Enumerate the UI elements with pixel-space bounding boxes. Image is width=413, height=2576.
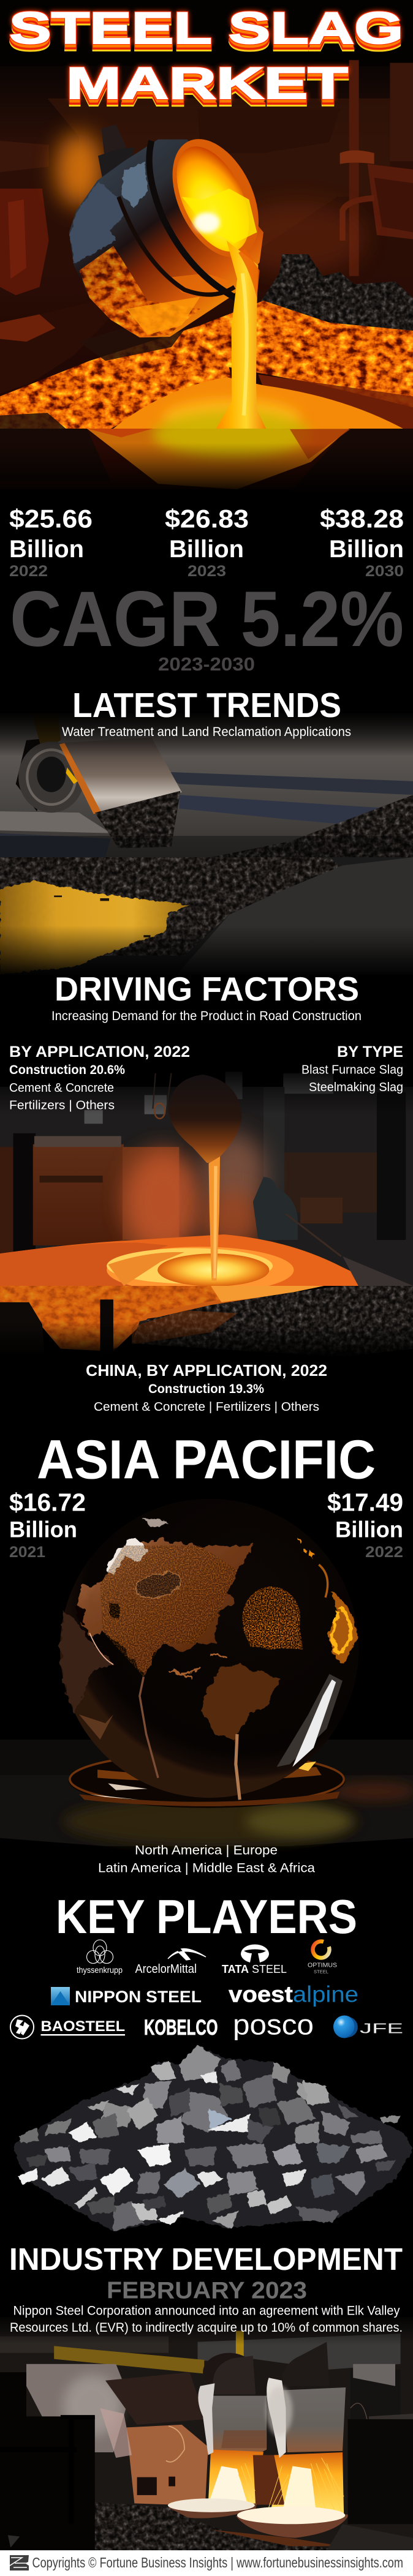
photo: ladle pouring molten slag (0, 0, 413, 495)
driving factor text: Increasing Demand for the Product in Road Construction (51, 1009, 362, 1023)
stat 2023: Billion (169, 536, 244, 563)
segment: by type: BY TYPE (337, 1043, 403, 1061)
stat 2030: $38.28 (320, 505, 404, 533)
segment: by application: Construction 20.6% (9, 1063, 125, 1077)
photo: steel plant ladles (0, 2311, 413, 2550)
logo: Optimus Steel: OPTIMUS (308, 1962, 337, 1969)
title: STEEL SLAG (9, 4, 403, 53)
title: MARKET (66, 59, 348, 108)
photo: steel slag pile (0, 2045, 413, 2239)
panel: Asia Pacific (0, 1429, 413, 1875)
logo: Baosteel (10, 2016, 125, 2039)
heading: latest trends: LATEST TRENDS (72, 686, 341, 725)
development text: Resources Ltd. (EVR) to indirectly acquire up to 10% of common shares. (10, 2321, 403, 2335)
stat 2021: $16.72 (9, 1488, 86, 1516)
heading: Asia Pacific: ASIA PACIFIC (37, 1429, 376, 1490)
logo: JFE: JFE (360, 2021, 403, 2037)
logo: ArcelorMittal (135, 1949, 206, 1976)
heading: driving factors: DRIVING FACTORS (55, 970, 359, 1008)
icon: Fortune Business Insights logo (10, 2555, 29, 2570)
development text (10, 2304, 403, 2335)
title (9, 4, 403, 108)
logo: JFE (333, 2016, 403, 2038)
other regions (98, 1843, 315, 1875)
logo: voestalpine: voestalpine (229, 1981, 358, 2007)
stat 2021 (9, 1488, 86, 1561)
segment: by application: Fertilizers | Others (9, 1098, 115, 1112)
stat 2022 regional: $17.49 (327, 1488, 403, 1516)
panel: market size stats (9, 505, 404, 675)
segment: China by application (86, 1361, 327, 1414)
heading: industry development: INDUSTRY DEVELOPMENT (9, 2242, 403, 2277)
stat 2030 (320, 505, 404, 580)
photo: furnace pouring (0, 1065, 413, 1293)
stat 2030: Billion (329, 536, 404, 563)
stat 2022 regional (327, 1488, 403, 1561)
logo: Optimus Steel (308, 1939, 337, 1974)
segment: by application: BY APPLICATION, 2022 (9, 1043, 190, 1061)
panel: hero (0, 0, 413, 495)
illustration: copper globe (0, 1499, 413, 1846)
segment: by application: Cement & Concrete (9, 1081, 114, 1095)
photo: road paving (0, 710, 413, 857)
photo: furnace rim and rock (0, 1286, 413, 1368)
panel: driving factors (0, 970, 413, 1414)
other regions: Latin America | Middle East & Africa (98, 1861, 315, 1875)
footer (0, 2550, 413, 2576)
stat 2022: Billion (9, 536, 84, 563)
logo: Optimus Steel: STEEL (314, 1969, 328, 1974)
stat 2023 (165, 505, 249, 580)
development text: Nippon Steel Corporation announced into an agreement with Elk Valley (13, 2304, 400, 2318)
logo: thyssenkrupp (77, 1940, 123, 1975)
stat 2023: $26.83 (165, 505, 249, 533)
stat 2023: 2023 (188, 563, 226, 580)
other regions: North America | Europe (135, 1843, 278, 1858)
stat 2022: 2022 (9, 563, 48, 580)
logo: Baosteel: BAOSTEEL (40, 2018, 125, 2035)
stat 2030: 2030 (365, 563, 404, 580)
stat 2021: Billion (9, 1517, 77, 1542)
segment: China by application: Construction 19.3% (148, 1382, 264, 1396)
panel: latest trends (0, 686, 413, 994)
segment: by type: Blast Furnace Slag (301, 1063, 403, 1076)
stat 2022 (9, 505, 93, 580)
segment: by type: Steelmaking Slag (309, 1080, 403, 1094)
heading: key players: KEY PLAYERS (56, 1890, 357, 1943)
logo: Kobelco: KOBELCO (144, 2016, 218, 2040)
logo: Posco: posco (233, 2008, 314, 2040)
segment: by type (301, 1043, 403, 1094)
panel: key players (10, 1890, 403, 2040)
logo: thyssenkrupp: thyssenkrupp (77, 1965, 123, 1975)
segment: China by application: CHINA, BY APPLICATION, 2022 (86, 1361, 327, 1380)
photo: gravel and yellow pool (0, 857, 413, 994)
stat 2022 regional: 2022 (365, 1544, 403, 1561)
stat 2022 regional: Billion (335, 1517, 403, 1542)
date: FEBRUARY 2023 (107, 2278, 307, 2304)
logo: Nippon Steel: NIPPON STEEL (75, 1988, 202, 2006)
logo: Tata Steel: TATA STEEL (222, 1963, 287, 1975)
logo: Tata Steel (222, 1945, 287, 1975)
stat 2022: $25.66 (9, 505, 93, 533)
latest trend text: Water Treatment and Land Reclamation Applications (62, 725, 351, 739)
segment: by application (9, 1043, 190, 1112)
CAGR period: 2023-2030 (158, 653, 255, 675)
panel: industry development (0, 2045, 413, 2550)
logo: ArcelorMittal: ArcelorMittal (135, 1962, 197, 1976)
segment: China by application: Cement & Concrete | Fertilizers | Others (94, 1400, 319, 1414)
stat 2021: 2021 (9, 1544, 45, 1561)
